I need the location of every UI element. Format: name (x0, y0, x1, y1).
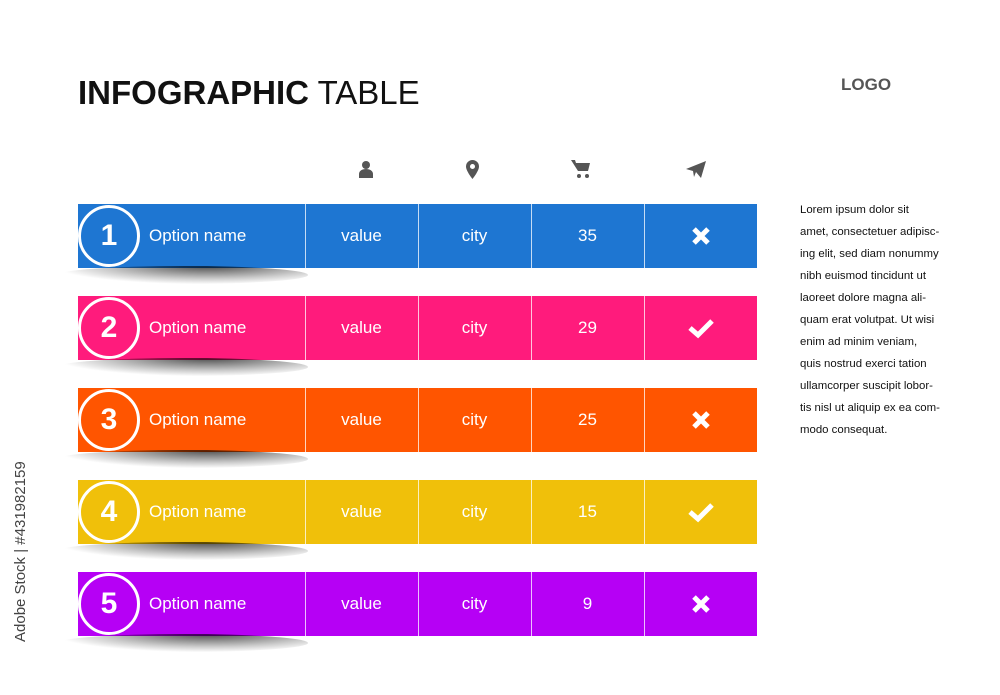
row 2 (78, 296, 757, 360)
number circle: 5 (101, 587, 117, 620)
row 5: 9 (583, 594, 592, 613)
lorem text block: ullamcorper suscipit lobor- (800, 380, 933, 392)
icon: cart (571, 160, 590, 178)
row 1: 35 (578, 226, 597, 245)
row 3: Option name (149, 410, 246, 429)
row 4: 15 (578, 502, 597, 521)
row 2: Option name (149, 318, 246, 337)
number circle: 2 (101, 311, 117, 344)
row 4: value (341, 502, 382, 521)
lorem text block: quis nostrud exerci tation (800, 358, 927, 370)
icon: location pin (466, 160, 479, 179)
row 5 (78, 572, 757, 636)
row 4 (78, 480, 757, 544)
row 5: value (341, 594, 382, 613)
lorem text block: Lorem ipsum dolor sit (800, 204, 909, 216)
row 3: 25 (578, 410, 597, 429)
row 1: value (341, 226, 382, 245)
watermark side text: Adobe Stock | #431982159 (12, 461, 29, 642)
number circle (78, 389, 140, 451)
row 1: city (462, 226, 487, 245)
row 3 (78, 388, 757, 452)
row 5: city (462, 594, 487, 613)
lorem text block: tis nisl ut aliquip ex ea com- (800, 402, 940, 414)
number circle (78, 481, 140, 543)
row 3: city (462, 410, 487, 429)
row 3: value (341, 410, 382, 429)
lorem text block: modo consequat. (800, 424, 887, 436)
icon: paper plane (686, 161, 706, 178)
row 1 (78, 204, 757, 268)
lorem text block: enim ad minim veniam, (800, 336, 917, 348)
lorem text block: nibh euismod tincidunt ut (800, 270, 926, 282)
row 1: Option name (149, 226, 246, 245)
number circle: 3 (101, 403, 117, 436)
lorem text block: quam erat volutpat. Ut wisi (800, 314, 934, 326)
row 4: Option name (149, 502, 246, 521)
number circle (78, 573, 140, 635)
number circle (78, 297, 140, 359)
lorem text block: ing elit, sed diam nonummy (800, 248, 939, 260)
title: INFOGRAPHIC TABLE (78, 74, 420, 111)
icon: person (359, 161, 373, 178)
row 2: 29 (578, 318, 597, 337)
lorem text block (800, 204, 940, 436)
number circle (78, 205, 140, 267)
logo: LOGO (841, 75, 891, 94)
row 2: city (462, 318, 487, 337)
row 4: city (462, 502, 487, 521)
header icons (359, 160, 706, 179)
lorem text block: laoreet dolore magna ali- (800, 292, 926, 304)
number circle: 1 (101, 219, 117, 252)
row 2: value (341, 318, 382, 337)
lorem text block: amet, consectetuer adipisc- (800, 226, 939, 238)
row 5: Option name (149, 594, 246, 613)
number circle: 4 (101, 495, 117, 528)
